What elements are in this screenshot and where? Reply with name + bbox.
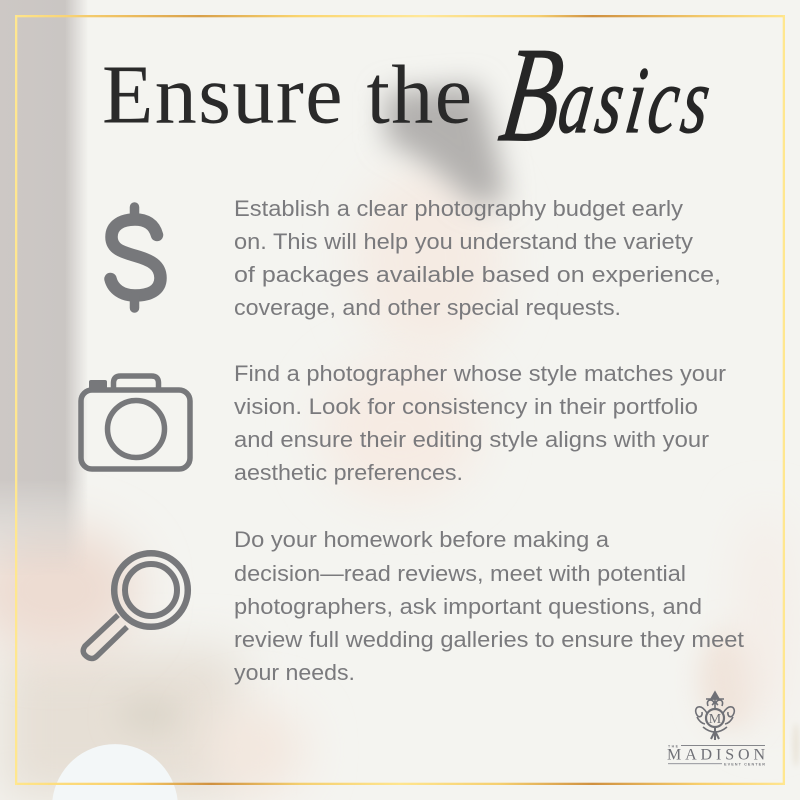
logo: The Madison Event Center: EVENT CENTER (724, 762, 765, 766)
logo: The Madison Event Center: MADISON (667, 746, 765, 764)
title: B (493, 20, 572, 170)
text: style: Find a photographer whose style matches your (234, 361, 726, 386)
text: style: vision. Look for consistency in their portfolio (234, 394, 698, 419)
text: homework: your needs. (234, 660, 355, 685)
icon: magnifying glass (83, 553, 188, 658)
text: budget: coverage, and other special requests. (234, 295, 621, 320)
text: homework (234, 527, 744, 685)
text: style: and ensure their editing style aligns with your (234, 427, 709, 452)
text: style (234, 361, 726, 485)
text: homework: review full wedding galleries to ensure they meet (234, 627, 744, 652)
text: budget: on. This will help you understand the variety (234, 229, 693, 254)
title: Ensure the (102, 48, 472, 142)
text: homework: Do your homework before making a (234, 527, 610, 552)
text: homework: decision—read reviews, meet with potential (234, 561, 686, 586)
logo: The Madison Event Center: THE (668, 744, 679, 748)
text: budget: of packages available based on experience, (234, 262, 721, 287)
icon: dollar sign (110, 207, 160, 308)
text: budget (234, 196, 721, 320)
text: homework: photographers, ask important questions, and (234, 594, 702, 619)
text: style: aesthetic preferences. (234, 460, 463, 485)
icon: camera (81, 376, 190, 469)
title (102, 20, 724, 170)
title: asics (553, 47, 721, 153)
logo crest: M (709, 712, 722, 727)
text: budget: Establish a clear photography budget early (234, 196, 683, 221)
logo: The Madison Event Center (667, 692, 765, 766)
